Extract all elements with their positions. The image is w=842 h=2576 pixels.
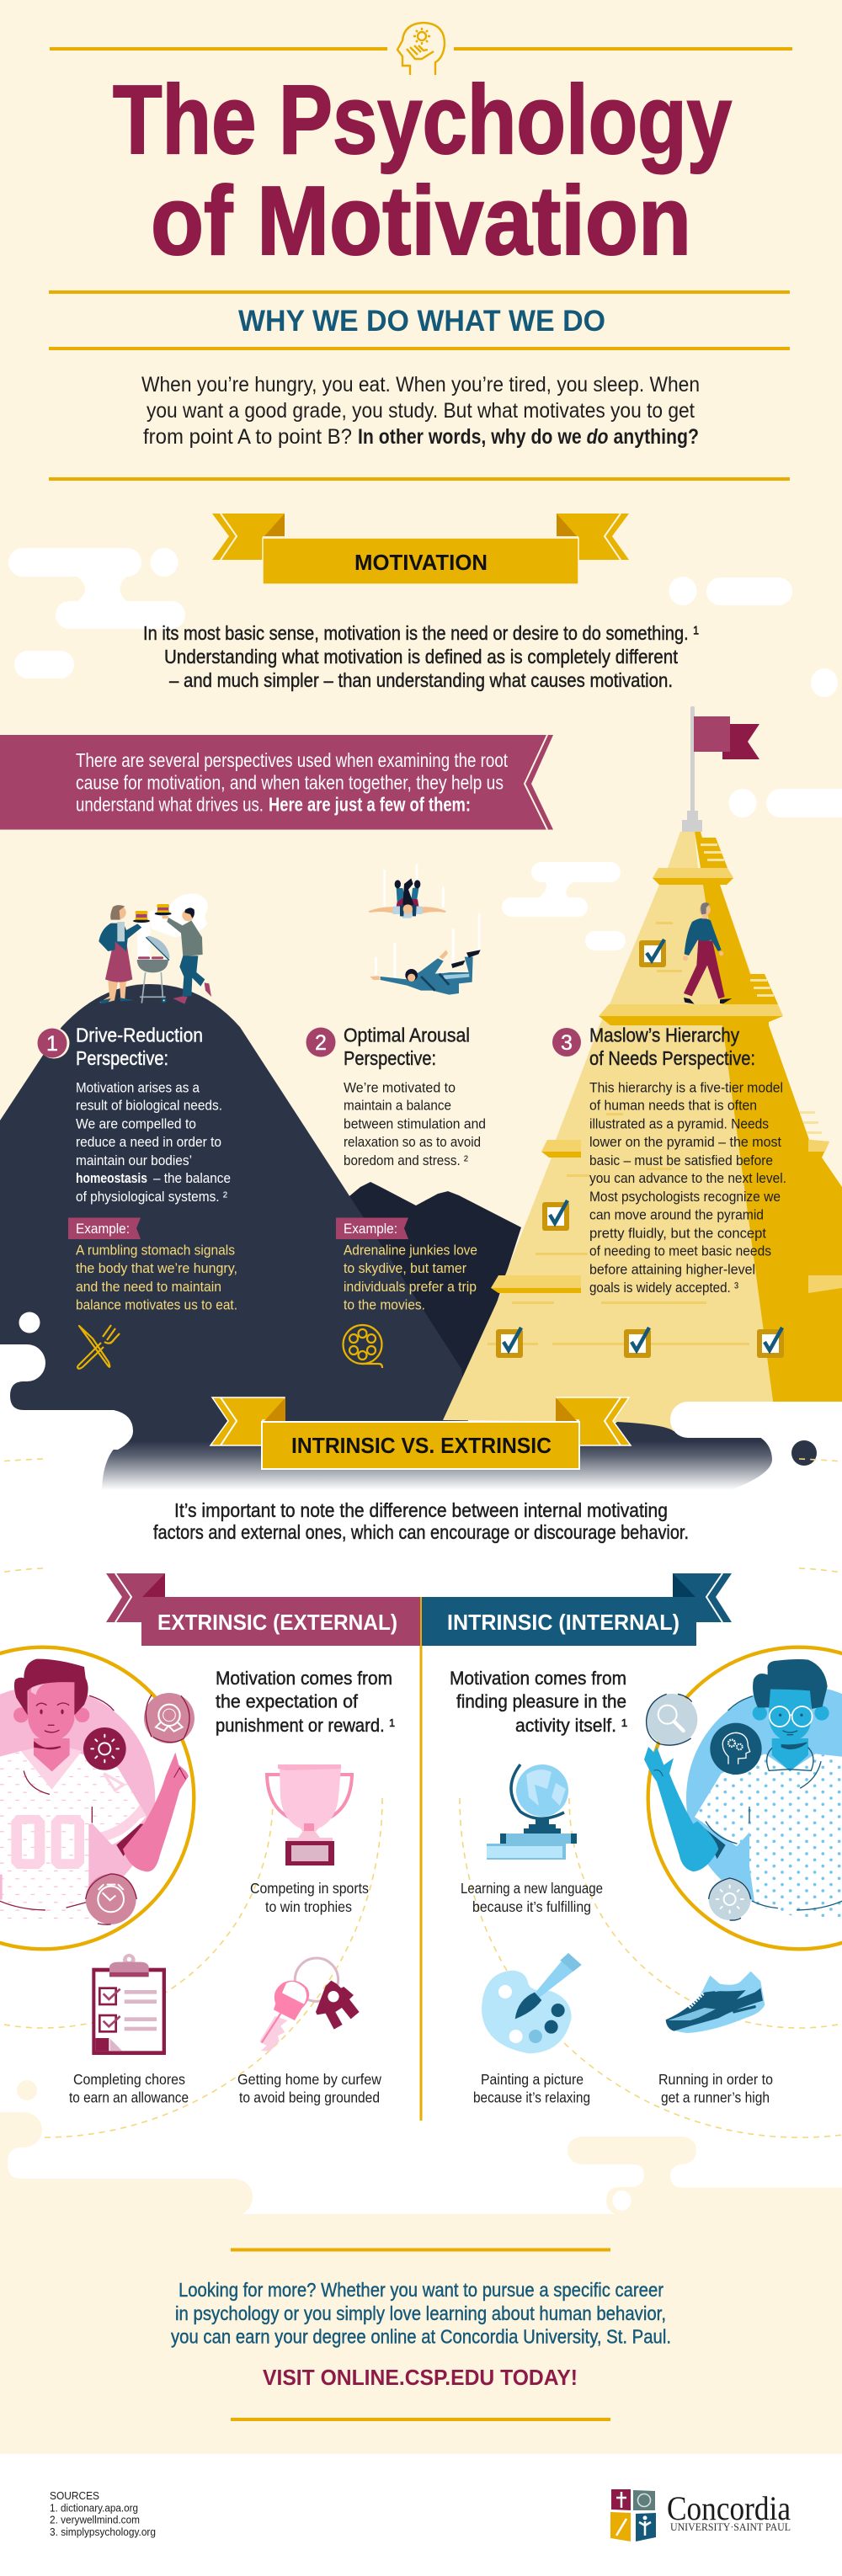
intro paragraph: When you’re hungry, you eat. When you’re tired, you sleep. When	[141, 373, 700, 397]
perspective 2: optimal arousal: maintain a balance	[344, 1098, 451, 1114]
perspective 3: maslow's hierarchy: This hierarchy is a five-tier model	[589, 1079, 783, 1095]
intrinsic person	[644, 1647, 842, 1949]
difference paragraph: It’s important to note the difference between internal motivating	[174, 1499, 668, 1521]
perspective 1: drive-reduction: and the need to maintain	[76, 1279, 221, 1295]
sources: SOURCES	[50, 2489, 99, 2502]
ribbon: intrinsic vs extrinsic: INTRINSIC VS. EXTRINSIC	[291, 1433, 552, 1458]
cream background	[0, 0, 842, 1347]
subtitle band	[49, 290, 790, 350]
sources: 3. simplypsychology.org	[50, 2525, 156, 2538]
caption: language: Learning a new language	[461, 1880, 603, 1897]
perspective 1: drive-reduction: the body that we’re hungry,	[76, 1260, 237, 1276]
flag on pyramid	[682, 706, 759, 832]
perspective 1: drive-reduction: Motivation arises as a	[76, 1079, 200, 1095]
perspective 2: optimal arousal: 2	[315, 1031, 327, 1055]
subtitle band: WHY WE DO WHAT WE DO	[238, 305, 605, 338]
perspective 3: maslow's hierarchy: 3	[561, 1031, 573, 1055]
perspective 2: optimal arousal: Example:	[344, 1221, 397, 1237]
extrinsic person	[0, 1647, 195, 1949]
captions: chores and curfew: to avoid being grounded	[239, 2089, 380, 2106]
motivation definition	[143, 622, 699, 691]
caption: language	[461, 1880, 603, 1915]
call to action: VISIT ONLINE.CSP.EDU TODAY!	[263, 2365, 578, 2390]
cream footer band	[0, 2080, 842, 2454]
perspective 1: drive-reduction: Example:	[76, 1221, 130, 1237]
perspective 1: drive-reduction: A rumbling stomach signals	[76, 1243, 235, 1259]
perspective 3: maslow's hierarchy: can move around the pyramid	[589, 1207, 764, 1222]
perspective 1: drive-reduction: homeostasis	[76, 1170, 147, 1186]
perspective 2: optimal arousal: to skydive, but tamer	[344, 1260, 466, 1276]
motivation definition: Understanding what motivation is defined as is completely different	[164, 646, 679, 668]
caption: language: because it’s fulfilling	[472, 1898, 591, 1915]
perspective 1: drive-reduction: We are compelled to	[76, 1116, 196, 1132]
captions: chores and curfew: to earn an allowance	[69, 2089, 189, 2106]
perspective 3: maslow's hierarchy: basic – must be satisfied before	[589, 1152, 773, 1168]
header: extrinsic	[106, 1573, 420, 1646]
extrinsic statement: punishment or reward. ¹	[216, 1715, 395, 1736]
center divider	[419, 1597, 423, 2121]
logo: concordia: UNIVERSITY·SAINT PAUL	[670, 2521, 791, 2533]
perspective 2: optimal arousal: relaxation so as to avoid	[344, 1134, 481, 1150]
perspective 3: maslow's hierarchy: of human needs that is often	[589, 1098, 757, 1114]
perspective 2: optimal arousal: Optimal Arousal	[344, 1024, 470, 1046]
header: intrinsic: INTRINSIC (INTERNAL)	[447, 1610, 679, 1635]
perspective 3: maslow's hierarchy: pretty fluidly, but the concept	[589, 1225, 766, 1241]
caption: trophies: Competing in sports	[250, 1880, 369, 1897]
sources: 2. verywellmind.com	[50, 2514, 140, 2526]
perspective 2: optimal arousal: Perspective:	[344, 1047, 436, 1069]
logo: concordia	[610, 2489, 791, 2541]
perspective 3: maslow's hierarchy: Maslow’s Hierarchy	[589, 1024, 739, 1046]
call to action: in psychology or you simply love learning about human behavior,	[175, 2302, 666, 2324]
perspective 1: drive-reduction: reduce a need in order to	[76, 1134, 221, 1150]
badge: magnifier	[646, 1694, 697, 1745]
captions: chores and curfew: Completing chores	[73, 2071, 185, 2088]
barbecue scene	[99, 893, 211, 1004]
back mountain	[345, 1182, 521, 1381]
caption: trophies	[250, 1880, 369, 1915]
difference paragraph	[153, 1499, 689, 1543]
difference paragraph: factors and external ones, which can encourage or discourage behavior.	[153, 1521, 689, 1543]
captions: chores and curfew: Getting home by curfew	[237, 2071, 381, 2088]
sources	[50, 2489, 156, 2538]
perspective 2: optimal arousal: boredom and stress. ²	[344, 1152, 468, 1168]
motivation definition: In its most basic sense, motivation is the need or desire to do something. ¹	[143, 622, 699, 644]
captions: painting and running	[473, 2071, 773, 2106]
perspective 2: optimal arousal: to the movies.	[344, 1297, 425, 1313]
pyramid	[443, 832, 842, 1438]
header: extrinsic: EXTRINSIC (EXTERNAL)	[157, 1610, 397, 1635]
icon: keys	[259, 1958, 360, 2052]
footer cloud hole	[613, 2190, 632, 2211]
ribbon: motivation	[212, 514, 629, 584]
call to action: you can earn your degree online at Concordia University, St. Paul.	[171, 2325, 671, 2347]
checkboxes lower	[496, 1200, 784, 1358]
banner: perspectives: cause for motivation, and when taken together, they help us	[76, 771, 504, 793]
header icon and rule	[50, 23, 792, 75]
icon: globe and books	[487, 1764, 577, 1860]
title	[113, 65, 732, 275]
banner: perspectives: understand what drives us.	[76, 793, 264, 815]
perspective 1: drive-reduction: – the balance	[153, 1170, 231, 1186]
icon: trophy	[267, 1764, 352, 1865]
perspective 1: drive-reduction: Perspective:	[76, 1047, 168, 1069]
icon: running shoe	[666, 1972, 765, 2033]
dashed orbit arcs	[0, 1459, 842, 2137]
title: The Psychology	[113, 65, 732, 174]
badge: sun light	[709, 1878, 751, 1920]
captions: painting and running: get a runner’s high	[661, 2089, 770, 2106]
perspective 2: optimal arousal: We’re motivated to	[344, 1079, 456, 1095]
captions: painting and running: because it’s relaxing	[473, 2089, 590, 2106]
intro paragraph: from point A to point B?	[143, 425, 352, 449]
motivation definition: – and much simpler – than understanding what causes motivation.	[169, 669, 673, 691]
perspective 3: maslow's hierarchy: goals is widely accepted. ³	[589, 1280, 738, 1296]
lower white clouds and ground	[0, 1312, 842, 1490]
ribbon: intrinsic vs extrinsic	[210, 1397, 631, 1469]
badge: stopwatch	[86, 1874, 136, 1924]
icon: fork and knife	[77, 1325, 120, 1369]
perspective 1: drive-reduction: balance motivates us to eat.	[76, 1297, 237, 1313]
header: intrinsic	[422, 1573, 732, 1646]
extrinsic statement: Motivation comes from	[216, 1668, 392, 1689]
walking man on pyramid	[683, 902, 732, 1004]
perspective 3: maslow's hierarchy	[552, 1024, 786, 1296]
perspective 1: drive-reduction: 1	[46, 1032, 58, 1056]
perspective 1: drive-reduction: maintain our bodies’	[76, 1152, 192, 1168]
extrinsic statement	[216, 1668, 395, 1736]
perspective 1: drive-reduction: of physiological systems. ²	[76, 1189, 227, 1205]
intro paragraph: you want a good grade, you study. But what motivates you to get	[147, 399, 695, 423]
perspective 1: drive-reduction: result of biological needs.	[76, 1098, 222, 1114]
clouds: upper	[8, 548, 842, 950]
perspective 3: maslow's hierarchy: you can advance to the next level.	[589, 1170, 786, 1186]
captions: painting and running: Running in order to	[658, 2071, 773, 2088]
icon: palette	[482, 1953, 582, 2053]
skydivers	[368, 865, 481, 995]
banner: perspectives: Here are just a few of them:	[269, 793, 471, 815]
intrinsic statement: finding pleasure in the	[456, 1691, 626, 1712]
banner: perspectives	[0, 735, 553, 830]
intrinsic statement	[450, 1668, 627, 1736]
captions: painting and running: Painting a picture	[481, 2071, 584, 2088]
badge: sun	[83, 1727, 126, 1770]
call to action: Looking for more? Whether you want to pursue a specific career	[179, 2279, 663, 2301]
checkbox upper	[639, 939, 666, 967]
title: of Motivation	[151, 166, 691, 275]
perspective 3: maslow's hierarchy: of Needs Perspective:	[589, 1047, 755, 1069]
intrinsic statement: Motivation comes from	[450, 1668, 626, 1689]
perspective 2: optimal arousal	[306, 1024, 486, 1313]
perspective 1: drive-reduction: Drive-Reduction	[76, 1024, 203, 1046]
badge: award	[144, 1693, 195, 1743]
perspective 2: optimal arousal: Adrenaline junkies love	[344, 1243, 477, 1259]
badge: brain	[710, 1723, 762, 1775]
captions: chores and curfew	[69, 2071, 381, 2106]
logo: concordia: Concordia	[667, 2489, 791, 2527]
perspective 3: maslow's hierarchy: illustrated as a pyramid. Needs	[589, 1116, 769, 1132]
perspective 2: optimal arousal: individuals prefer a trip	[344, 1279, 477, 1295]
perspective 3: maslow's hierarchy: before attaining higher-level	[589, 1261, 755, 1278]
caption: trophies: to win trophies	[265, 1898, 352, 1915]
banner: perspectives: There are several perspectives used when examining the root	[76, 749, 508, 771]
intro paragraph	[141, 373, 700, 449]
icon: film reel	[344, 1325, 382, 1368]
intrinsic statement: activity itself. ¹	[515, 1715, 627, 1736]
perspective 3: maslow's hierarchy: of needing to meet basic needs	[589, 1243, 771, 1259]
extrinsic statement: the expectation of	[216, 1691, 359, 1712]
intro paragraph: In other words, why do we do anything?	[358, 425, 699, 449]
icon: clipboard	[92, 1954, 166, 2055]
sources: 1. dictionary.apa.org	[50, 2502, 138, 2514]
perspective 1: drive-reduction	[37, 1024, 237, 1313]
perspective 2: optimal arousal: between stimulation and	[344, 1116, 486, 1132]
perspective 3: maslow's hierarchy: lower on the pyramid – the most	[589, 1134, 781, 1150]
front mountain	[0, 984, 472, 1448]
call to action	[171, 2248, 671, 2421]
ribbon: motivation: MOTIVATION	[354, 550, 488, 575]
perspective 3: maslow's hierarchy: Most psychologists recognize we	[589, 1189, 781, 1205]
